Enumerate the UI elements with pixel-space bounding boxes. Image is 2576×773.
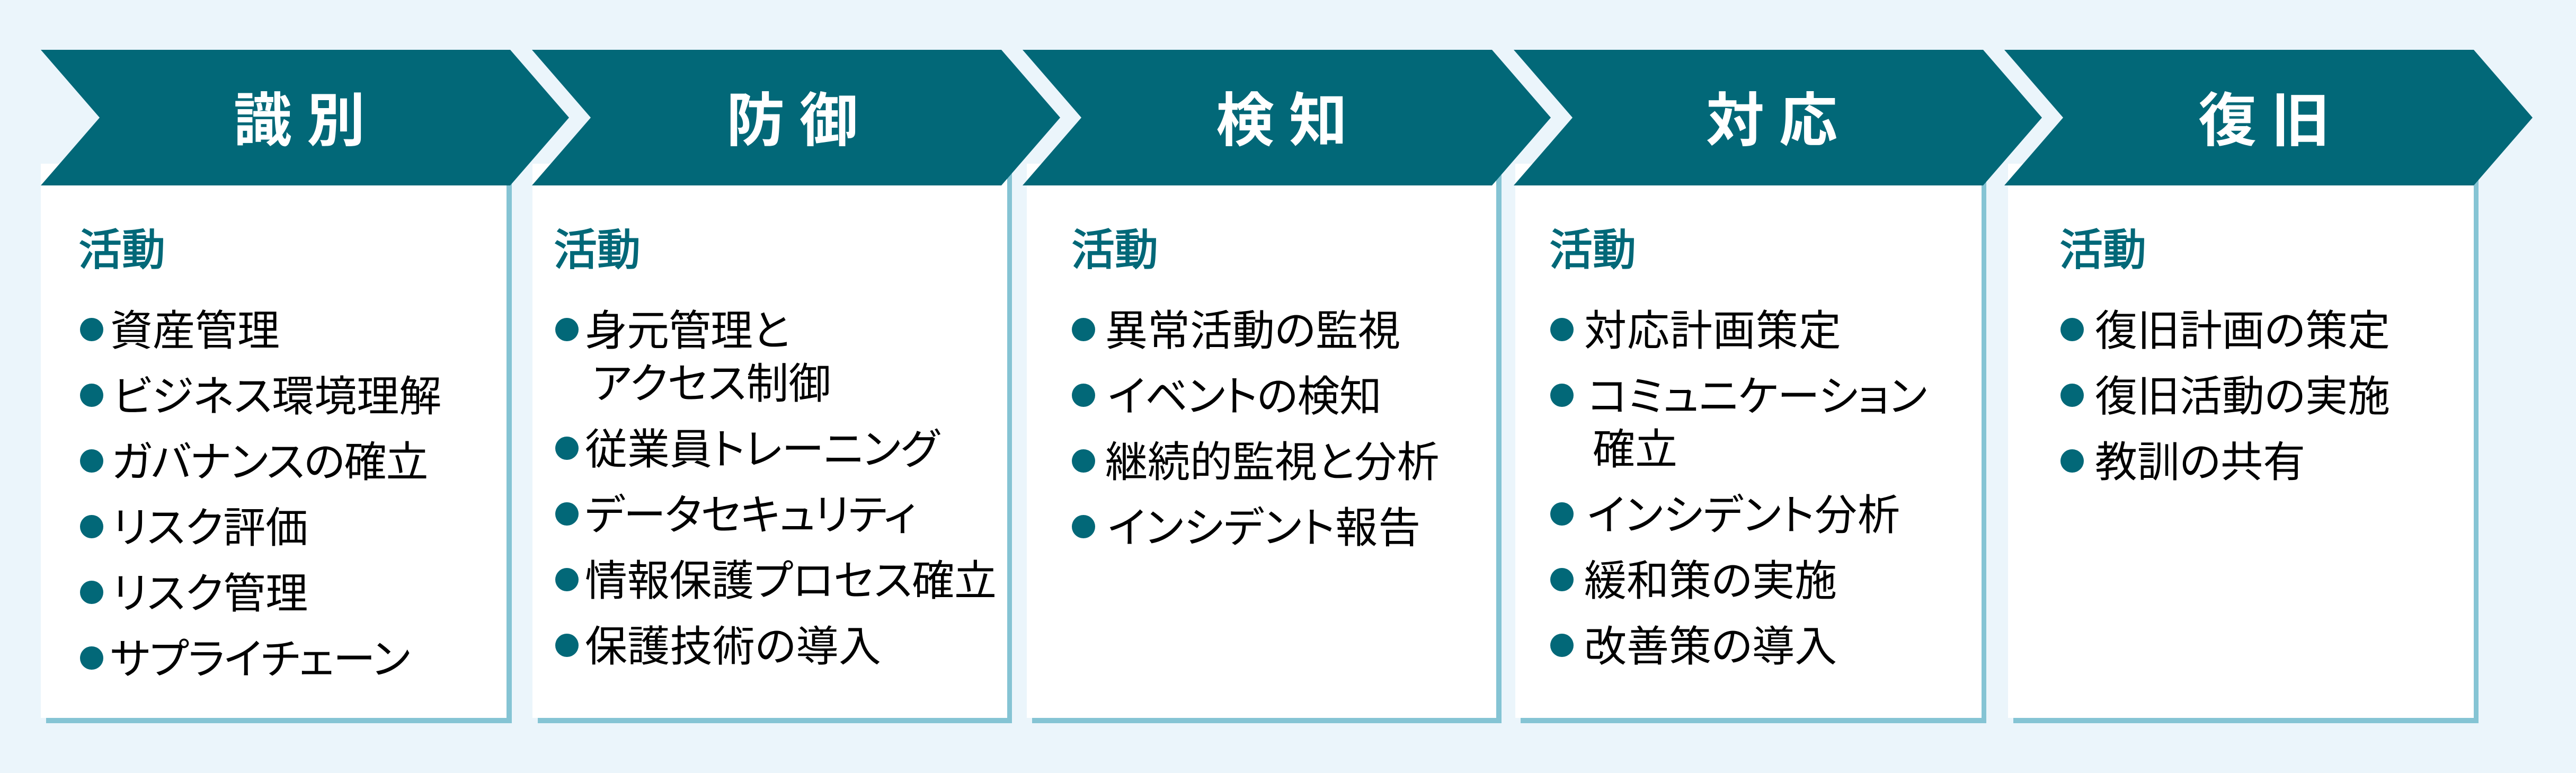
activity list: 識別: ガバナンスの確立 [111, 439, 428, 486]
activity list: 防御: アクセス制御 [592, 360, 831, 407]
activity list: 識別: リスク管理 [112, 570, 308, 617]
activity list: 防御: 身元管理と [585, 307, 789, 354]
chevron header: 防御 [532, 50, 1060, 185]
subheading: 活動: 活動 [1071, 226, 1158, 274]
subheading: 活動: 活動 [2059, 226, 2146, 274]
subheading: 活動: 活動 [554, 226, 641, 274]
panel: 防御 [532, 50, 1060, 723]
chevron header: 識別: 識別 [234, 88, 380, 154]
activity list: 対応: 対応計画策定 [1584, 307, 1842, 354]
card: 対応 [1515, 164, 1986, 723]
activity list: 対応: コミュニケーション [1588, 373, 1927, 420]
activity list: 検知: インシデント報告 [1108, 504, 1421, 552]
activity list: 対応: 改善策の導入 [1584, 623, 1837, 670]
activity list: 検知 [1072, 307, 1439, 552]
activity list: 対応: インシデント分析 [1587, 492, 1900, 539]
activity list: 対応: 確立 [1593, 426, 1677, 473]
chevron header: 復旧 [2004, 50, 2533, 185]
activity list: 復旧: 教訓の共有 [2095, 439, 2305, 486]
chevron header: 対応: 対応 [1706, 88, 1852, 154]
activity list: 防御: データセキュリティ [585, 492, 916, 539]
card: 復旧 [2008, 164, 2479, 723]
activity list: 防御: 従業員トレーニング [585, 426, 940, 473]
panel: 復旧 [2004, 50, 2533, 723]
panel: 検知 [1023, 50, 1551, 723]
activity list: 対応: 緩和策の実施 [1584, 557, 1837, 605]
activity list: 識別 [80, 307, 441, 683]
chevron header: 識別 [41, 50, 569, 185]
activity list: 検知: 異常活動の監視 [1105, 307, 1400, 354]
activity list: 防御: 保護技術の導入 [585, 623, 881, 670]
card: 防御 [532, 164, 1012, 723]
activity list: 復旧: 復旧計画の策定 [2095, 307, 2390, 354]
card: 識別 [41, 164, 512, 723]
activity list: 復旧: 復旧活動の実施 [2095, 373, 2390, 420]
chevron header: 検知: 検知 [1216, 88, 1362, 154]
activity list: 防御: 情報保護プロセス確立 [585, 557, 997, 605]
panel: 識別 [41, 50, 569, 723]
activity list: 識別: ビジネス環境理解 [113, 373, 441, 420]
activity list: 識別: サプライチェーン [110, 636, 410, 683]
chevron header: 防御: 防御 [726, 88, 873, 154]
subheading: 活動: 活動 [1549, 226, 1636, 274]
activity list: 復旧 [2060, 307, 2390, 486]
chevron header: 対応 [1514, 50, 2042, 185]
activity list: 検知: 継続的監視と分析 [1105, 439, 1439, 486]
chevron header: 復旧: 復旧 [2198, 88, 2344, 154]
panel: 対応 [1514, 50, 2042, 723]
activity list: 識別: 資産管理 [110, 307, 280, 354]
chevron header: 検知 [1023, 50, 1551, 185]
activity list: 対応 [1550, 307, 1927, 670]
activity list: 識別: リスク評価 [112, 504, 308, 552]
activity list: 検知: イベントの検知 [1108, 373, 1381, 420]
card: 検知 [1027, 164, 1502, 723]
subheading: 活動: 活動 [78, 226, 165, 274]
activity list: 防御 [555, 307, 997, 670]
